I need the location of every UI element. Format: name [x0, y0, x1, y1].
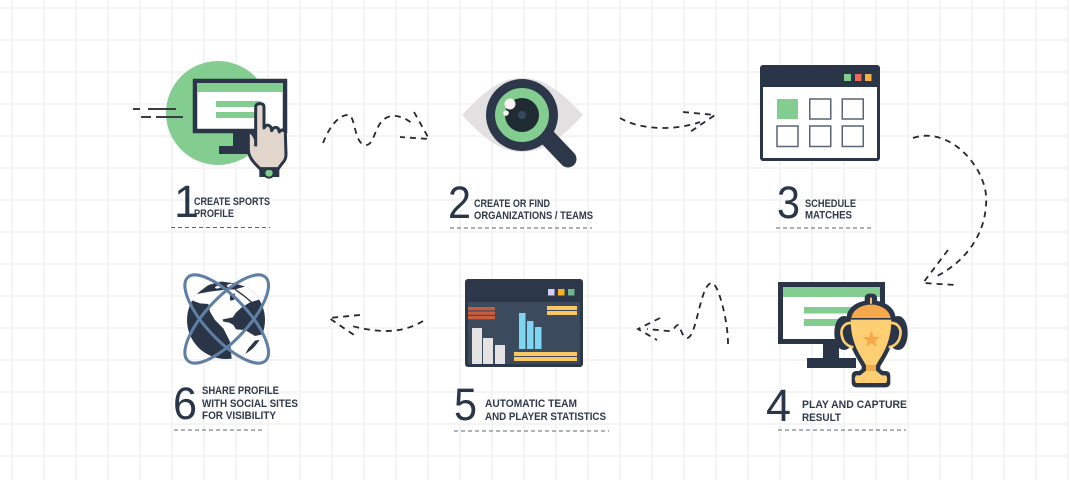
label: play and capture result [802, 399, 907, 424]
label: create sports profile [194, 196, 270, 220]
step number 5: 5 [454, 379, 477, 430]
arrow: step 4 to 5 [638, 283, 728, 344]
label: schedule matches: MATCHES [805, 210, 852, 222]
icon: monitor with hand on green circle [133, 61, 286, 179]
arrow: step 2 to 3 [620, 112, 715, 134]
label: create sports profile: CREATE SPORTS [194, 196, 270, 208]
label: share profile with social sites for visibility: WITH SOCIAL SITES [202, 398, 298, 410]
step 5: automatic statistics [454, 279, 609, 431]
step 1: create sports profile [133, 61, 286, 228]
step 6: share profile [172, 263, 298, 430]
label: automatic team and player statistics [485, 398, 606, 423]
label: schedule matches [805, 198, 856, 222]
label: automatic team and player statistics: AUTOMATIC TEAM [485, 398, 577, 410]
icon: globe with orbits [183, 273, 270, 365]
label: share profile with social sites for visibility: FOR VISIBILITY [202, 410, 277, 422]
label: create or find organizations / teams: ORGANIZATIONS / TEAMS [474, 210, 593, 222]
label: create or find organizations / teams: CREATE OR FIND [474, 198, 550, 210]
arrow: step 3 to 4 [913, 136, 986, 285]
step 4: play and capture result [766, 284, 907, 431]
step number 6: 6 [173, 378, 197, 429]
step number 1: 1 [174, 176, 199, 227]
label: play and capture result: PLAY AND CAPTURE [802, 399, 907, 411]
step number 3: 3 [777, 177, 800, 228]
icon: eye under magnifier [462, 78, 583, 159]
step number 4: 4 [766, 380, 791, 431]
label: create sports profile: PROFILE [194, 208, 234, 220]
label: automatic team and player statistics: AND PLAYER STATISTICS [485, 411, 606, 423]
icon: calendar window [760, 65, 880, 161]
icon: monitor with trophy [780, 284, 903, 383]
step 2: create or find organizations [448, 78, 593, 228]
label: share profile with social sites for visibility [202, 385, 298, 422]
step number 2: 2 [448, 177, 471, 228]
label: create or find organizations / teams [474, 198, 593, 222]
label: schedule matches: SCHEDULE [805, 198, 856, 210]
arrow: step 5 to 6 [329, 315, 423, 337]
label: play and capture result: RESULT [802, 412, 841, 424]
step 3: schedule matches [760, 65, 880, 228]
arrow: step 1 to 2 [323, 112, 429, 145]
label: share profile with social sites for visibility: SHARE PROFILE [202, 385, 279, 397]
icon: statistics dashboard [465, 279, 583, 367]
